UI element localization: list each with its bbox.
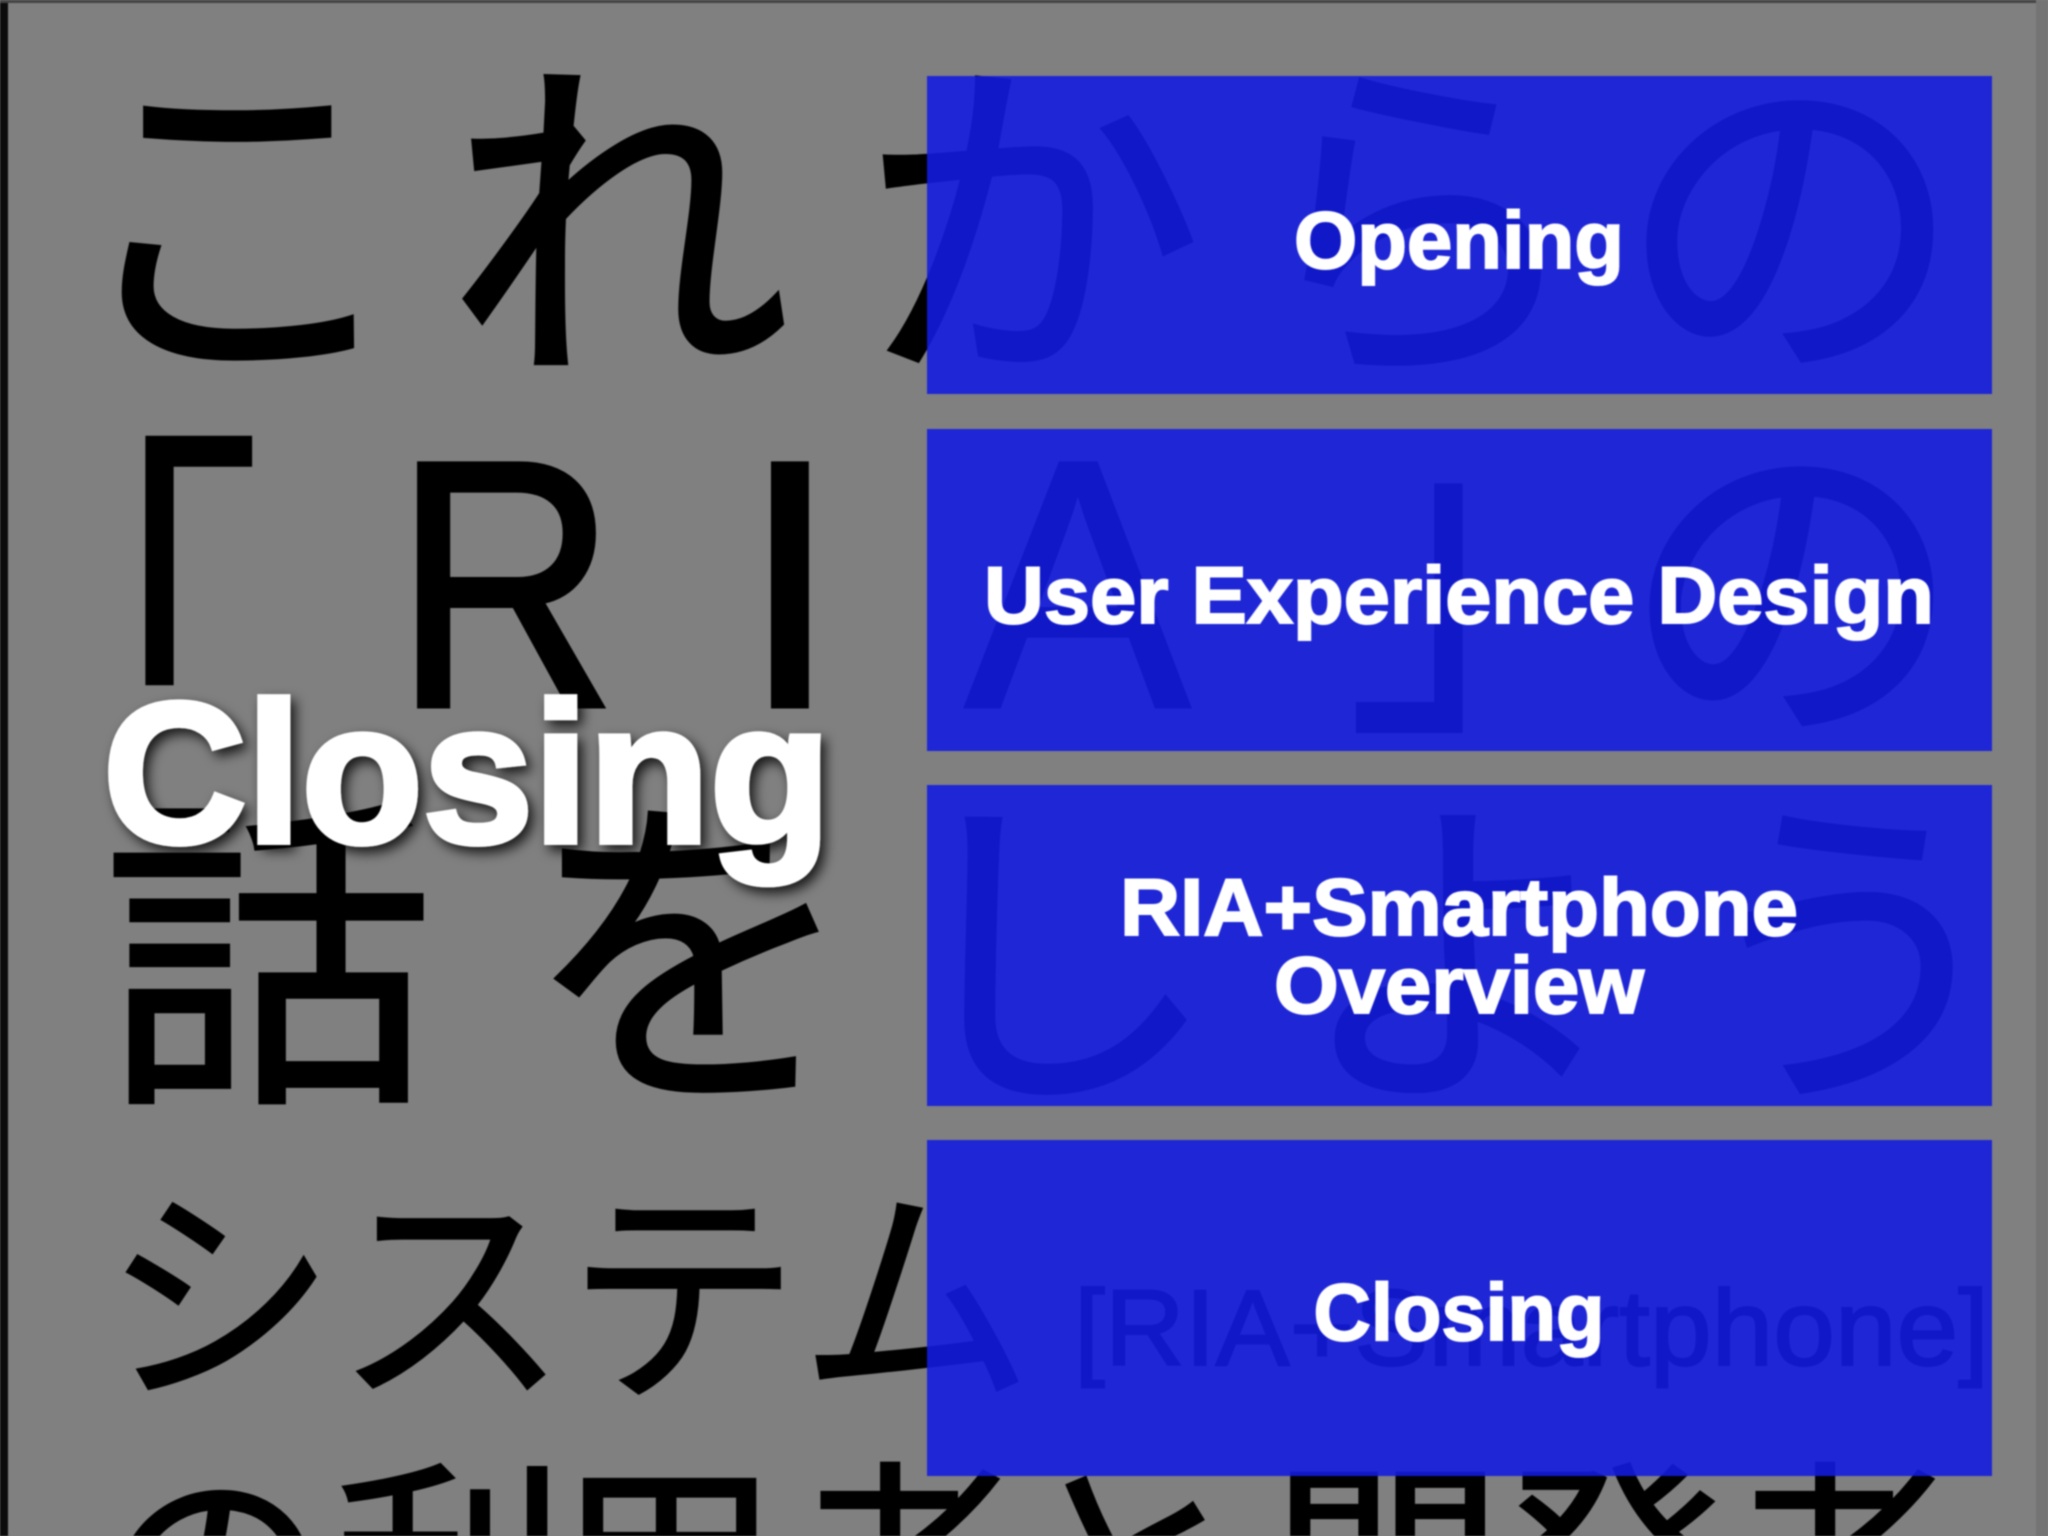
title line 4 latin: [RIA+Smartphone] xyxy=(1074,1267,1989,1388)
menu panel: closing: Closing xyxy=(1314,1268,1604,1358)
title line 3: 話をしよう xyxy=(103,777,2015,1146)
letter A: A xyxy=(966,387,1191,781)
menu panel: opening: Opening xyxy=(1294,196,1624,286)
large closing heading: Closing xyxy=(103,662,831,885)
menu panel: opening xyxy=(927,76,1992,394)
closing bracket: 」 xyxy=(1347,355,1671,779)
menu panel: RIA+Smartphone overview: Overview xyxy=(1274,941,1645,1031)
title line 2 xyxy=(0,355,1962,839)
menu panel: RIA+Smartphone overview: RIA+Smartphone xyxy=(1120,863,1798,953)
title line 1: これからの xyxy=(64,39,1963,424)
hiragana no: の xyxy=(1622,406,1962,786)
menu panel: user experience design xyxy=(927,429,1992,751)
menu panel: closing xyxy=(927,1140,1992,1476)
menu panel: RIA+Smartphone overview xyxy=(927,785,1992,1106)
title line 4: システム xyxy=(103,1173,1032,1432)
letter R: R xyxy=(394,389,616,782)
letter I: I xyxy=(741,387,839,781)
menu panel: user experience design: User Experience Design xyxy=(984,551,1934,641)
